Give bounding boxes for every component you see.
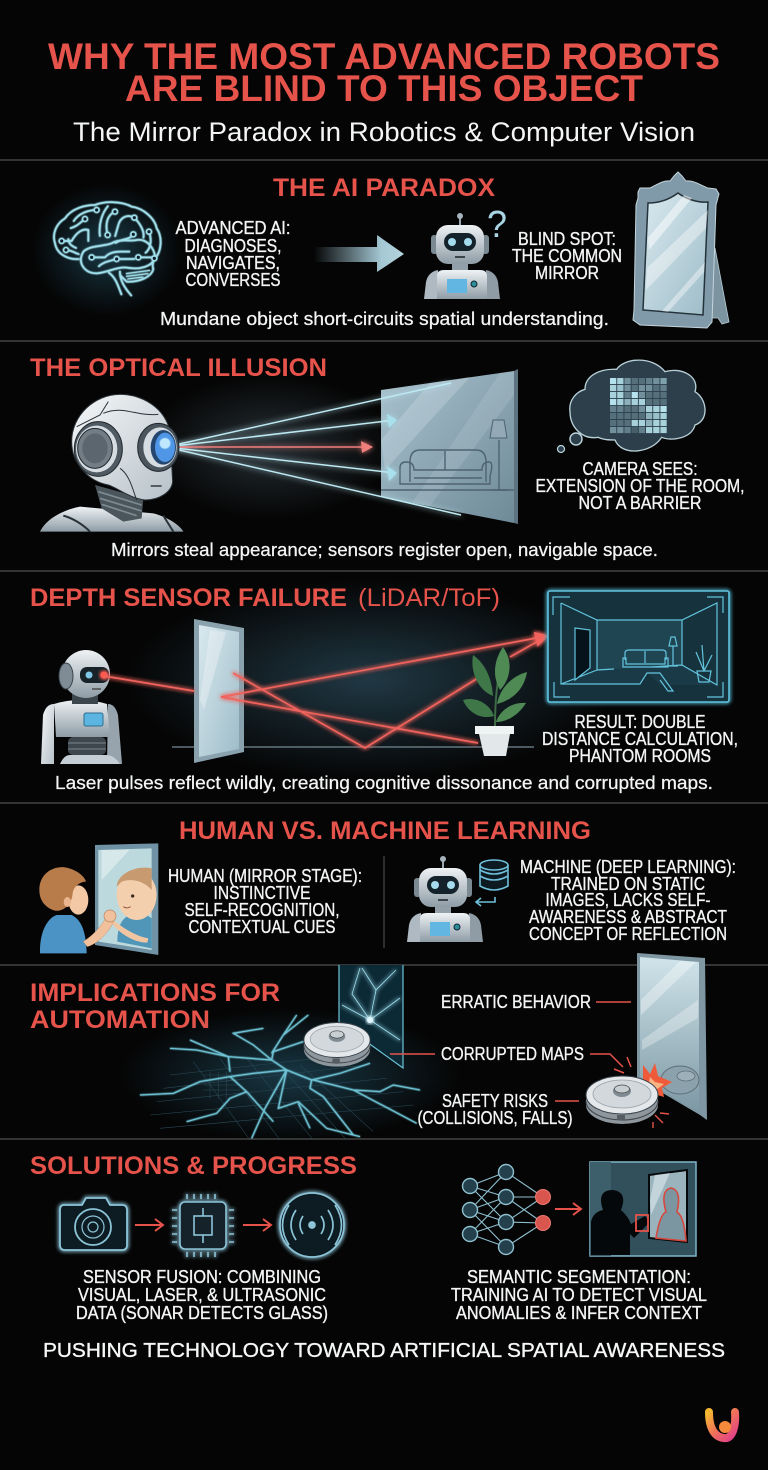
text: advanced AI: ADVANCED AI:	[176, 218, 290, 238]
icon: glass pane with room reflection	[381, 369, 518, 524]
heading: implications: AUTOMATION	[30, 1006, 210, 1034]
icon: confused robot: ?	[487, 204, 507, 246]
text: blind spot: THE COMMON	[512, 246, 622, 266]
text: human mirror stage	[168, 866, 362, 937]
text: camera sees: NOT A BARRIER	[578, 493, 702, 513]
text: result	[542, 712, 738, 766]
panel: the AI paradox	[32, 172, 729, 329]
text: advanced AI: CONVERSES	[186, 270, 280, 290]
text: blind spot: MIRROR	[535, 263, 599, 283]
heading: depth sensor failure	[30, 584, 500, 612]
icon: robot vacuum collision	[586, 1076, 658, 1124]
label: corrupted maps	[390, 1044, 631, 1073]
text: machine deep learning: MACHINE (DEEP LEARNING):	[520, 857, 736, 877]
text: machine deep learning	[520, 857, 736, 944]
icon: robot head in profile	[40, 394, 183, 532]
icon: collision burst	[643, 1063, 672, 1102]
icon: glowing circuit brain	[32, 184, 182, 316]
text: advanced AI: NAVIGATES,	[186, 253, 280, 273]
icon: cracked glass panel	[339, 965, 403, 1068]
label: corrupted maps: CORRUPTED MAPS	[441, 1044, 584, 1064]
text: machine deep learning: TRAINED ON STATIC	[551, 874, 705, 894]
heading: depth sensor failure: (LiDAR/ToF)	[358, 584, 500, 612]
text: result: DISTANCE CALCULATION,	[542, 729, 738, 749]
text: sensor fusion	[76, 1267, 328, 1323]
heading: implications: IMPLICATIONS FOR	[30, 979, 280, 1007]
text: advanced AI	[176, 218, 290, 290]
heading: implications	[30, 979, 280, 1034]
heading: depth sensor failure: DEPTH SENSOR FAILURE	[30, 584, 347, 612]
icon: humanoid robot	[41, 650, 122, 764]
floor line	[172, 746, 534, 748]
text: camera sees	[536, 459, 744, 513]
icon: camera vision beams	[166, 383, 461, 515]
icon: corrupted map cracks	[120, 1009, 460, 1141]
text: human mirror stage: HUMAN (MIRROR STAGE):	[168, 866, 362, 886]
label: erratic behavior: ERRATIC BEHAVIOR	[441, 992, 591, 1012]
arrow: network to scene	[555, 1203, 581, 1215]
text: blind spot	[512, 229, 622, 283]
text: blind spot: BLIND SPOT:	[518, 229, 616, 249]
icon: standing mirror	[194, 619, 244, 763]
header	[48, 36, 720, 147]
label: safety risks: (COLLISIONS, FALLS)	[418, 1108, 572, 1128]
glow: sensor background	[125, 580, 615, 780]
icon: camera	[60, 1198, 127, 1250]
subtitle: The Mirror Paradox in Robotics & Computer Vision	[73, 117, 695, 147]
icon: ornate standing mirror	[633, 172, 729, 328]
text: semantic segmentation: TRAINING AI TO DETECT VISUAL	[451, 1285, 707, 1305]
text: semantic segmentation: ANOMALIES & INFER CONTEXT	[456, 1303, 702, 1323]
sparks	[653, 1113, 669, 1128]
text: advanced AI: DIAGNOSES,	[184, 236, 282, 256]
icon: brand logo	[709, 1412, 735, 1438]
text: result: RESULT: DOUBLE	[574, 712, 706, 732]
icon: segmented person at mirror	[590, 1162, 696, 1256]
icon: confused robot	[424, 204, 507, 299]
icon: robot with database	[407, 856, 508, 942]
icon: thought cloud with pixels	[558, 360, 705, 452]
text: sensor fusion: SENSOR FUSION: COMBINING	[83, 1267, 321, 1287]
heading: the AI paradox: THE AI PARADOX	[273, 174, 495, 202]
icon: child at mirror	[39, 843, 158, 955]
icon: neural network	[462, 1164, 550, 1254]
text: semantic segmentation: SEMANTIC SEGMENTATION:	[467, 1267, 691, 1287]
heading: solutions: SOLUTIONS & PROGRESS	[30, 1152, 357, 1180]
text: camera sees: CAMERA SEES:	[582, 459, 698, 479]
glow: beam background	[145, 375, 395, 519]
heading: human vs machine: HUMAN VS. MACHINE LEARNING	[179, 817, 591, 845]
icon: robot vacuum on map	[304, 1023, 370, 1067]
arrow: AI to robot	[314, 235, 404, 272]
text: human mirror stage: SELF-RECOGNITION,	[184, 900, 340, 920]
caption: laser pulses: Laser pulses reflect wildly, creating cognitive dissonance and corrupted maps.	[55, 773, 713, 793]
heading: the optical illusion: THE OPTICAL ILLUSION	[30, 354, 327, 382]
icon: phantom room map screen	[548, 591, 729, 702]
panel: human vs machine learning	[39, 817, 736, 955]
label: safety risks	[418, 1091, 579, 1128]
icon: sonar rings	[280, 1193, 344, 1257]
title: WHY THE MOST ADVANCED ROBOTS	[48, 36, 720, 77]
text: machine deep learning: AWARENESS & ABSTRACT	[529, 907, 727, 927]
text: result: PHANTOM ROOMS	[569, 746, 711, 766]
caption: mirrors steal appearance: Mirrors steal appearance; sensors register open, navigable space.	[111, 540, 658, 560]
laser reflection paths	[104, 633, 547, 748]
arrow: chip to sonar	[243, 1219, 271, 1231]
text: machine deep learning: CONCEPT OF REFLECTION	[529, 924, 727, 944]
icon: processor chip	[172, 1194, 234, 1257]
title	[48, 36, 720, 109]
panel: depth sensor failure	[30, 580, 738, 793]
panel: implications for automation	[30, 953, 707, 1141]
panel: the optical illusion	[30, 354, 744, 560]
text: sensor fusion: DATA (SONAR DETECTS GLASS)	[76, 1303, 328, 1323]
text: human mirror stage: CONTEXTUAL CUES	[188, 917, 336, 937]
closing statement: PUSHING TECHNOLOGY TOWARD ARTIFICIAL SPATIAL AWARENESS	[43, 1340, 725, 1362]
label: safety risks: SAFETY RISKS	[442, 1091, 548, 1111]
panel: solutions and progress	[30, 1152, 707, 1323]
title: ARE BLIND TO THIS OBJECT	[125, 68, 643, 109]
text: semantic segmentation	[451, 1267, 707, 1323]
text: sensor fusion: VISUAL, LASER, & ULTRASONIC	[78, 1285, 326, 1305]
icon: mirror with reflected vacuum	[637, 953, 707, 1120]
text: machine deep learning: IMAGES, LACKS SELF-	[546, 890, 710, 910]
icon: potted plant	[463, 647, 527, 756]
text: human mirror stage: INSTINCTIVE	[214, 883, 310, 903]
caption: mundane object: Mundane object short-circuits spatial understanding.	[160, 309, 609, 329]
arrow: camera to chip	[135, 1219, 163, 1231]
